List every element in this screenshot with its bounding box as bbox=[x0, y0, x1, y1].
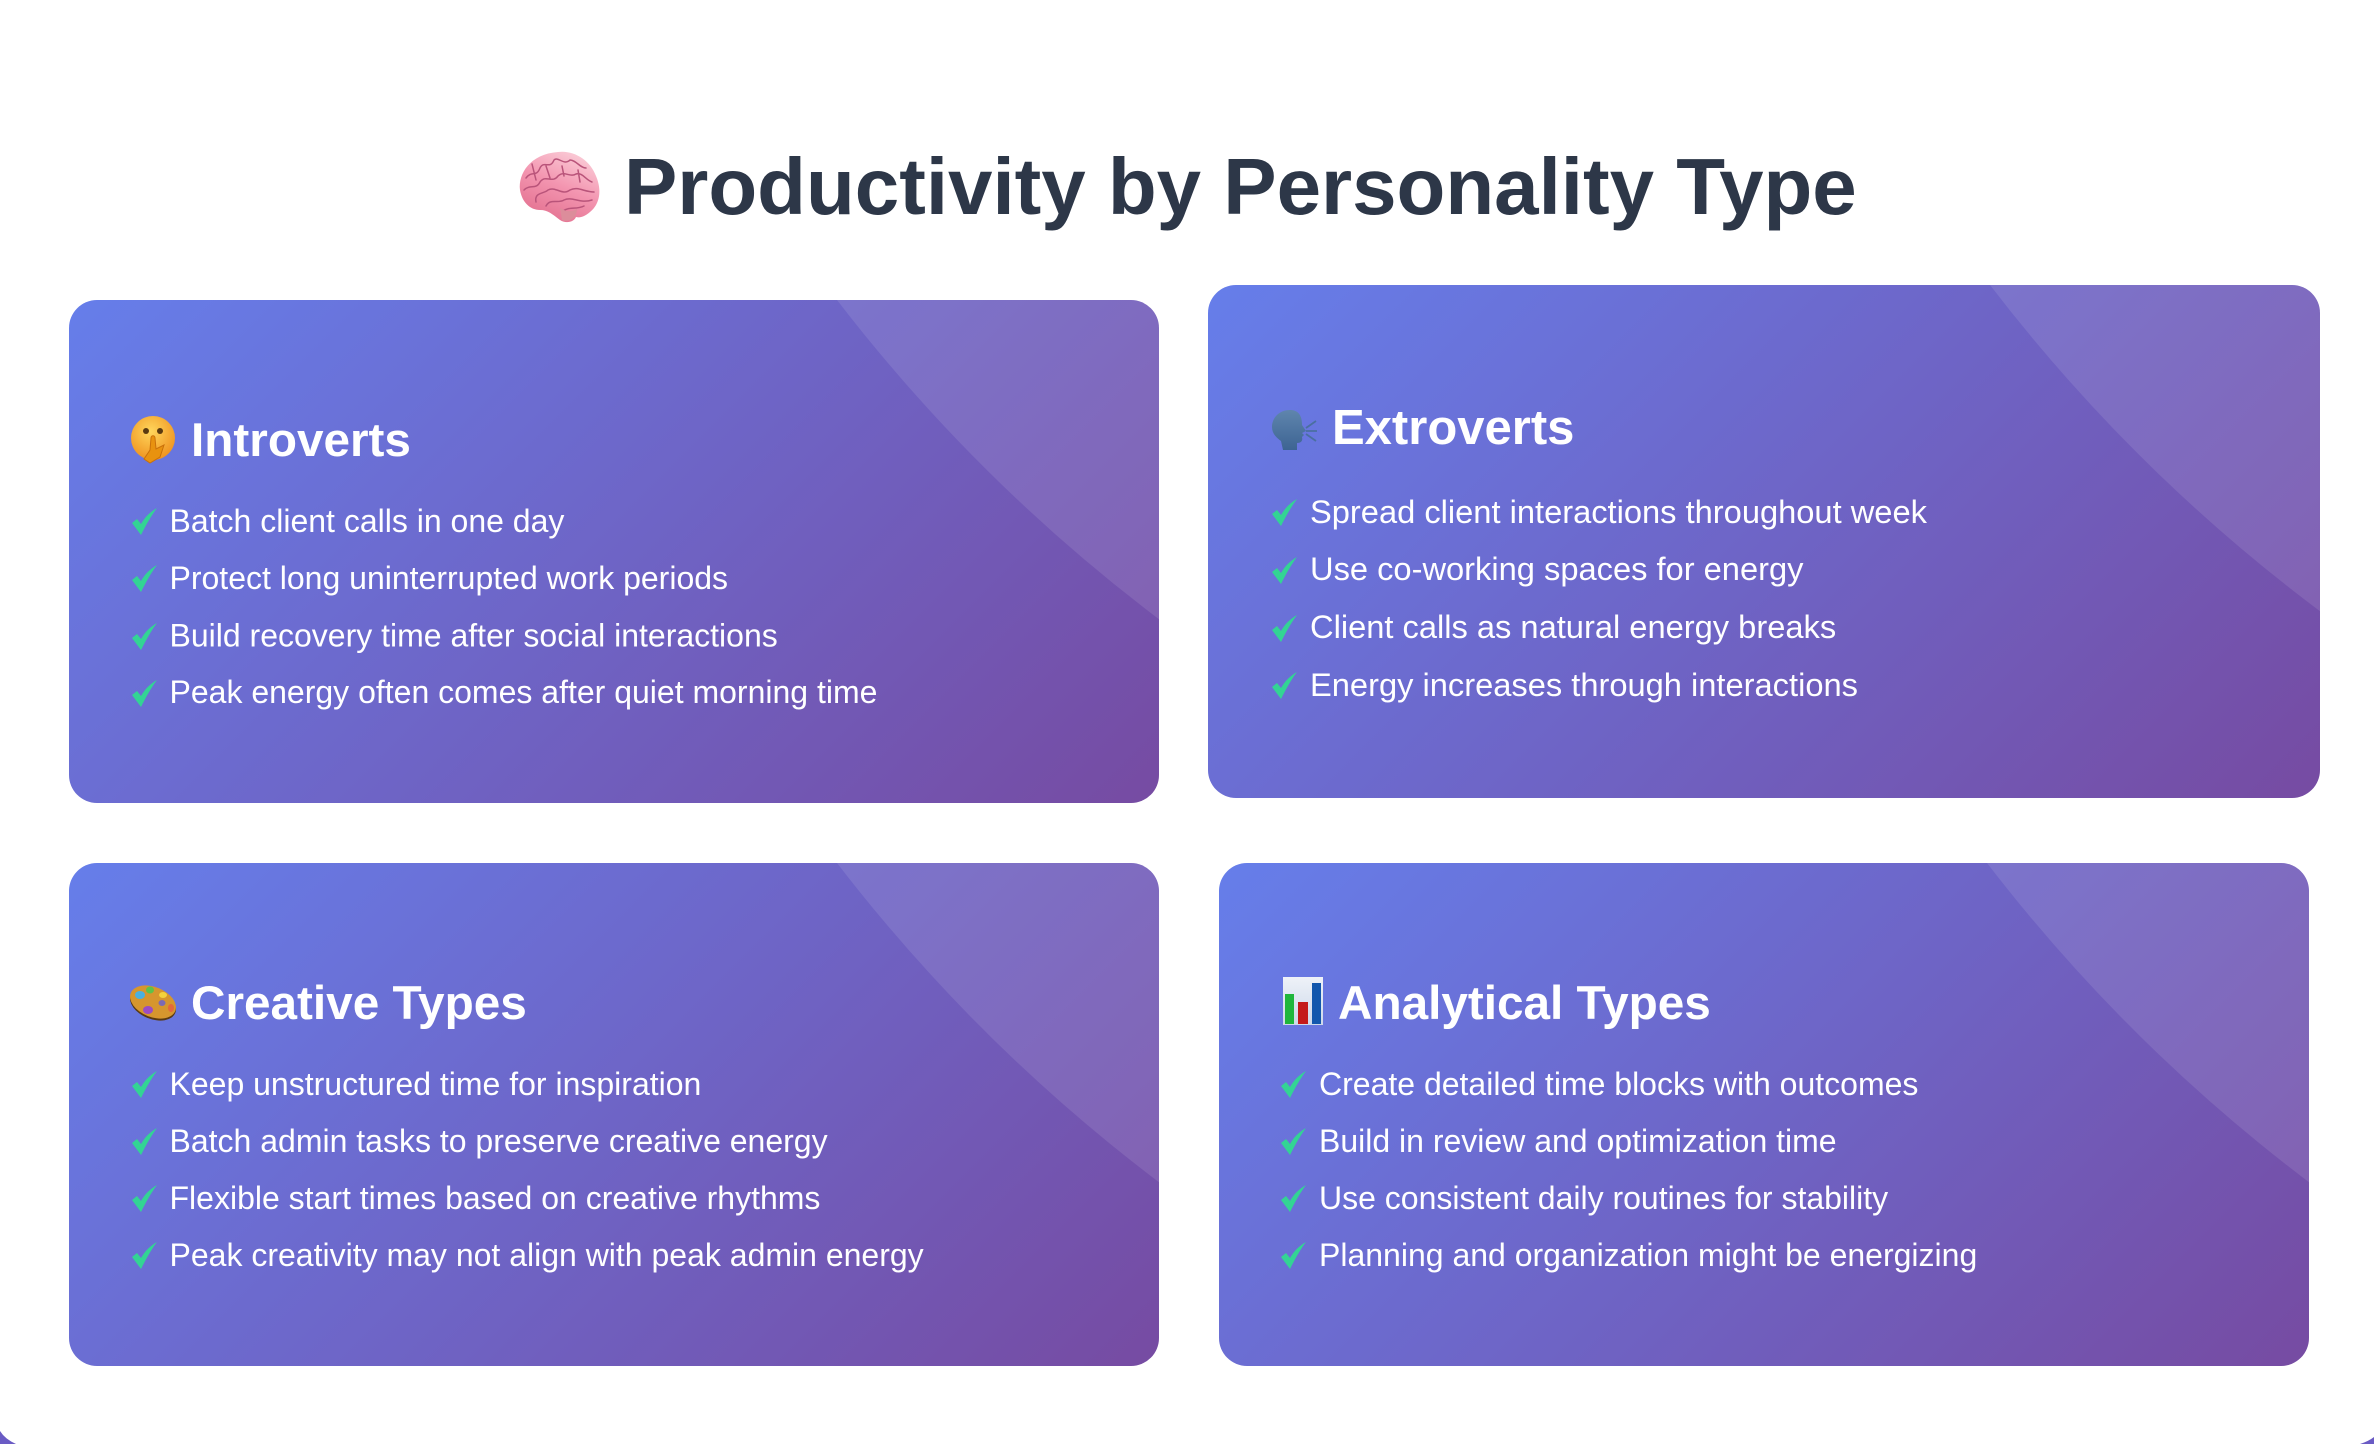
icon: bar chart bbox=[1283, 977, 1323, 1025]
list item: Batch client calls in one day bbox=[170, 503, 564, 539]
list item: Client calls as natural energy breaks bbox=[1310, 608, 1836, 645]
icon: brain bbox=[520, 152, 599, 222]
card heading: Creative Types bbox=[191, 977, 527, 1030]
panel: creative types bbox=[69, 853, 1160, 1366]
panel: introverts bbox=[69, 290, 1160, 803]
card heading: Extroverts bbox=[1332, 401, 1574, 455]
decorative highlight bbox=[837, 290, 1160, 620]
card heading: Analytical Types bbox=[1338, 977, 1711, 1030]
list item: Flexible start times based on creative rhythms bbox=[170, 1180, 820, 1216]
card heading: Introverts bbox=[191, 414, 411, 467]
list item: Peak creativity may not align with peak admin energy bbox=[170, 1237, 924, 1273]
decorative highlight bbox=[1990, 275, 2321, 612]
background corners bbox=[0, 1431, 2374, 1444]
list item: Planning and organization might be energizing bbox=[1319, 1237, 1977, 1273]
list item: Spread client interactions throughout week bbox=[1310, 493, 1928, 530]
list item: Peak energy often comes after quiet morning time bbox=[170, 674, 877, 710]
icon: shushing face bbox=[131, 416, 175, 463]
list item: Create detailed time blocks with outcomes bbox=[1319, 1066, 1918, 1102]
list item: Keep unstructured time for inspiration bbox=[170, 1066, 701, 1102]
title bbox=[520, 142, 1857, 231]
list item: Build in review and optimization time bbox=[1319, 1123, 1837, 1159]
panel: extroverts bbox=[1208, 275, 2321, 798]
list item: Build recovery time after social interactions bbox=[170, 618, 778, 654]
icon: speaking head bbox=[1272, 410, 1317, 450]
panel: analytical types bbox=[1219, 853, 2310, 1366]
list item: Batch admin tasks to preserve creative energy bbox=[170, 1123, 828, 1159]
list item: Energy increases through interactions bbox=[1310, 666, 1858, 703]
list item: Use consistent daily routines for stability bbox=[1319, 1180, 1888, 1216]
heading text: Productivity by Personality Type bbox=[624, 142, 1857, 231]
decorative highlight bbox=[837, 853, 1160, 1183]
icon: palette bbox=[125, 979, 181, 1027]
list item: Protect long uninterrupted work periods bbox=[170, 560, 728, 596]
list item: Use co-working spaces for energy bbox=[1310, 550, 1804, 587]
decorative highlight bbox=[1987, 853, 2310, 1183]
